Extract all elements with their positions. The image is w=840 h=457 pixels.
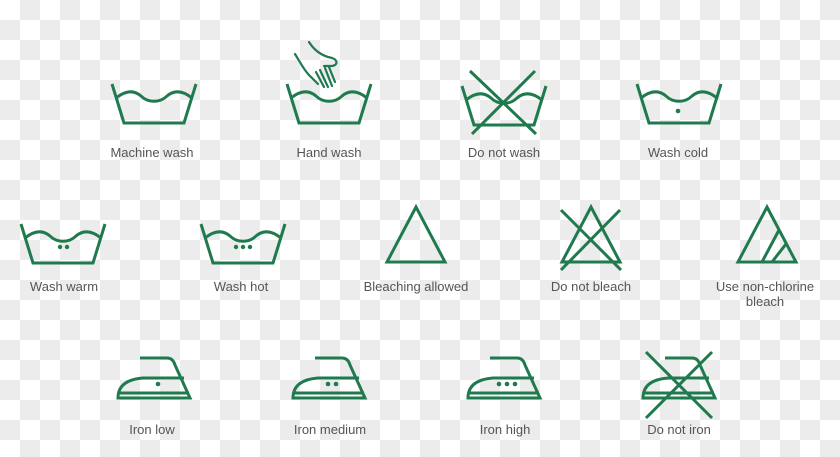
item: wash cold [637, 84, 721, 160]
item: wash hot [201, 224, 285, 294]
item: iron high [468, 358, 540, 437]
item: hand wash [287, 42, 371, 160]
item: iron medium [293, 358, 366, 437]
item: iron high: Iron high [480, 422, 530, 437]
item: non-chlorine bleach: bleach [746, 294, 784, 309]
item: do not wash [462, 71, 546, 160]
item: wash warm: Wash warm [30, 279, 98, 294]
item: bleaching allowed [364, 207, 468, 294]
item: do not wash: Do not wash [468, 145, 540, 160]
item: wash hot: Wash hot [214, 279, 269, 294]
item: non-chlorine bleach [716, 207, 814, 309]
item: wash cold: Wash cold [648, 145, 708, 160]
item: machine wash [110, 84, 196, 160]
item: do not bleach [551, 207, 631, 294]
item: do not bleach: Do not bleach [551, 279, 631, 294]
item: do not iron [643, 352, 715, 437]
item: hand wash: Hand wash [296, 145, 362, 160]
item: machine wash: Machine wash [110, 145, 194, 160]
item: iron medium: Iron medium [294, 422, 366, 437]
item: non-chlorine bleach: Use non-chlorine [716, 279, 814, 294]
item: do not iron: Do not iron [647, 422, 711, 437]
icon: hand [295, 42, 336, 87]
item: bleaching allowed: Bleaching allowed [364, 279, 468, 294]
item: iron low [118, 358, 190, 437]
item: wash warm [21, 224, 105, 294]
item: iron low: Iron low [129, 422, 175, 437]
